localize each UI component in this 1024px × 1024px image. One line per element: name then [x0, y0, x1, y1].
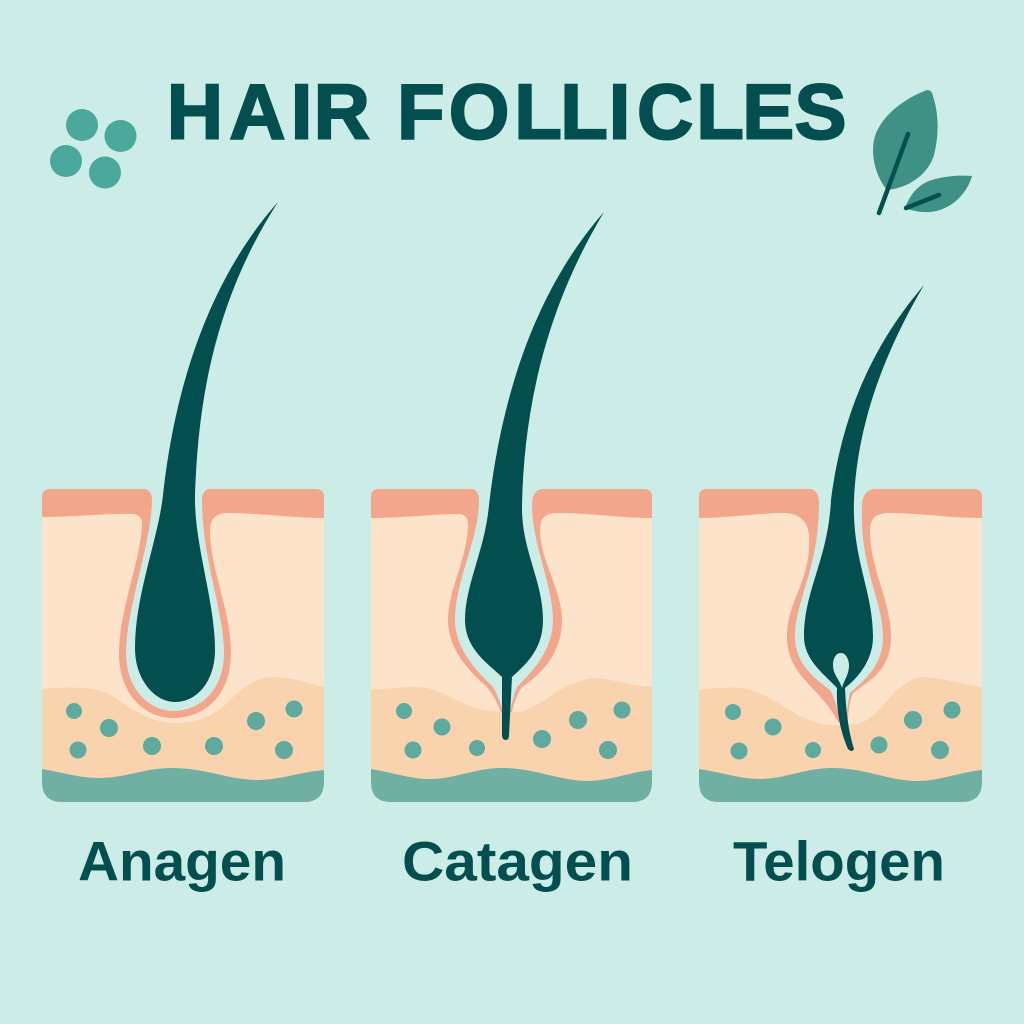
- hair: [804, 285, 924, 751]
- label: Telogen: Telogen: [733, 830, 945, 892]
- title: HAIR FOLLICLES: [167, 68, 847, 156]
- panel: catagen: [371, 212, 652, 802]
- follicle sheath: [42, 489, 324, 718]
- follicle channel: [126, 488, 224, 711]
- follicle channel: [795, 488, 883, 722]
- skin dots: [396, 702, 630, 759]
- panel: anagen: [42, 202, 324, 802]
- icon: dots cluster: [50, 109, 136, 188]
- hair: [465, 212, 604, 740]
- label: Anagen: Anagen: [78, 830, 286, 892]
- follicle sheath: [371, 489, 652, 712]
- infographic canvas: [42, 83, 982, 892]
- hair bulb club: [833, 653, 849, 688]
- follicle channel: [455, 488, 553, 712]
- hair: [135, 202, 278, 702]
- label: Catagen: Catagen: [402, 830, 633, 892]
- panel: telogen: [699, 285, 982, 802]
- icon: leaves: [873, 90, 972, 213]
- follicle sheath: [699, 489, 982, 722]
- skin dots: [725, 702, 960, 760]
- skin dots: [66, 700, 302, 759]
